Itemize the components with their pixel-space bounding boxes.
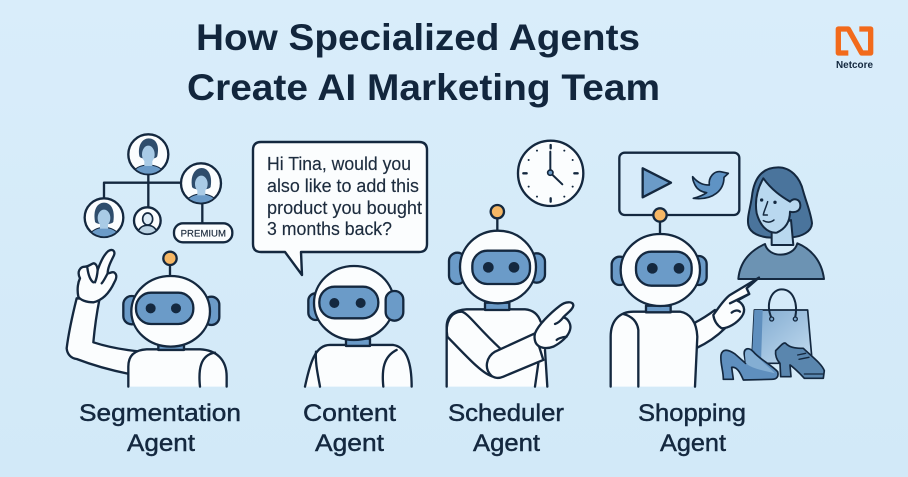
robot: shopping [611,208,759,387]
speech bubble: Hi Tina, would you [267,154,411,174]
label: segmentation agent: Agent [127,430,195,457]
icon: social media screen [619,153,739,215]
panel: content agent [253,142,427,457]
robot: segmentation [67,250,227,387]
label: segmentation agent: Segmentation [79,400,241,427]
icon: clock [518,141,583,206]
speech bubble: also like to add this [267,176,419,196]
label: shopping agent: Shopping [638,400,746,427]
label: shopping agent: Agent [660,430,726,457]
title [187,16,660,108]
panel: scheduler agent [447,141,583,457]
panel: segmentation agent [67,134,241,457]
title: How Specialized Agents [196,16,640,58]
speech bubble: 3 months back? [267,219,392,239]
robot: scheduler [447,205,573,387]
icon: customer portrait [738,167,824,279]
logo: Netcore: Netcore [836,59,873,71]
label: segmentation agent [79,400,241,457]
label: content agent: Agent [315,430,384,457]
label: content agent [303,400,396,457]
icon: customer segment tree [85,134,232,242]
robot: content [305,266,412,387]
panel: shopping agent [611,153,824,457]
icon: customer segment tree: PREMIUM [181,228,226,238]
speech bubble: product you bought [267,198,422,218]
title: Create AI Marketing Team [187,66,660,108]
speech bubble [253,142,427,275]
label: content agent: Content [303,400,396,427]
label: shopping agent [638,400,746,457]
label: scheduler agent: Scheduler [448,400,564,427]
icon: shopping bag and shoes [721,289,824,380]
logo: Netcore [836,29,873,71]
label: scheduler agent: Agent [473,430,540,457]
label: scheduler agent [448,400,564,457]
